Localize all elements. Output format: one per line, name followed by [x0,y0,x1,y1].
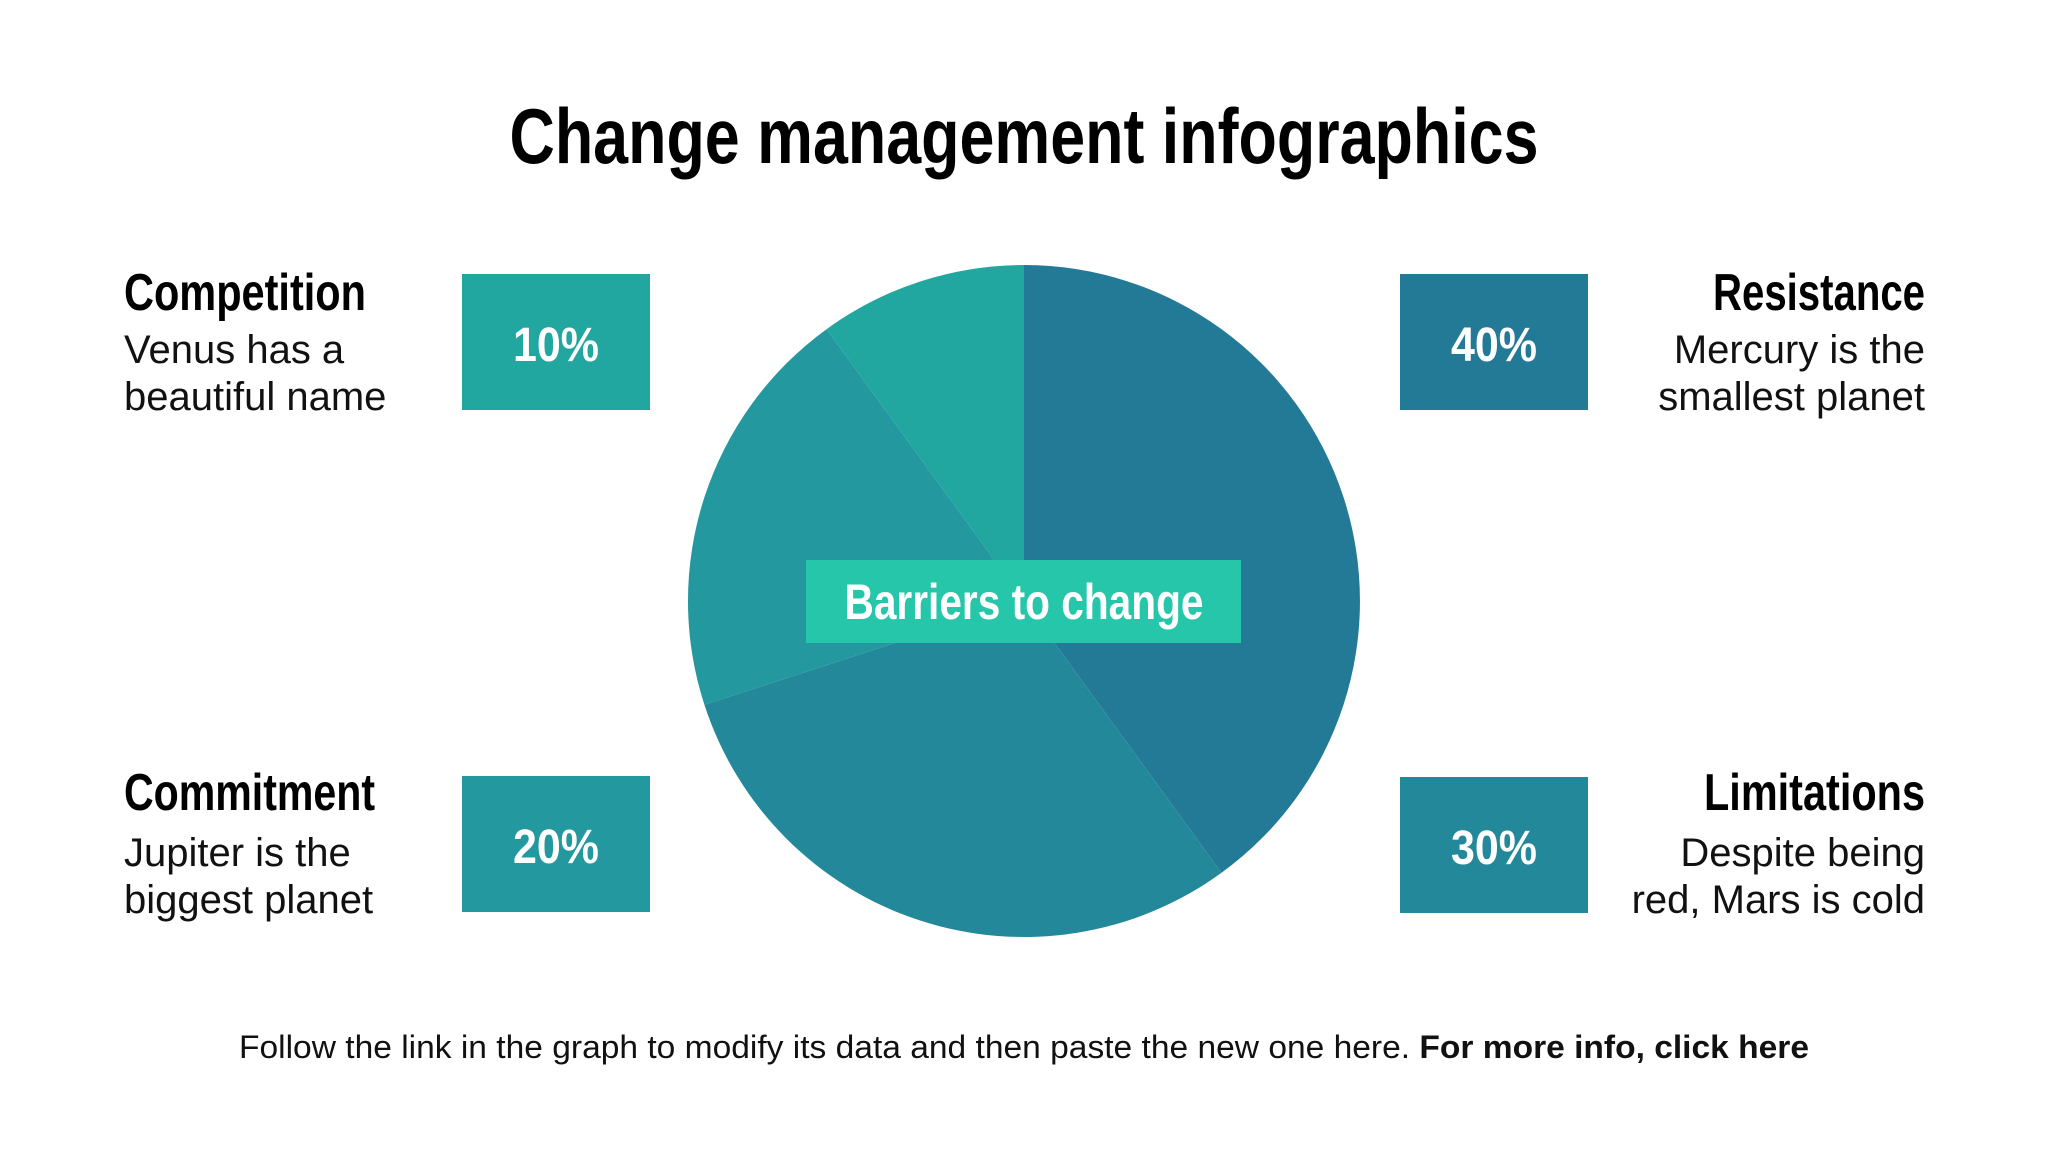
slice: commitment 20% [688,329,1024,705]
text block: resistance: smallest planet [1658,375,1925,419]
text block: limitations: red, Mars is cold [1632,878,1925,922]
slice: competition 10% [826,265,1024,601]
box: 10%: 10% [513,319,599,372]
slice: limitations 30% [704,601,1222,937]
box: 20% [462,776,650,912]
box: 40%: 40% [1451,319,1537,372]
pie chart [688,265,1360,937]
box: 30%: 30% [1451,822,1537,875]
box: 30% [1400,777,1588,913]
text block: limitations [1632,764,1925,922]
footer: Follow the link in the graph to modify its data and then paste the new one here. For more info, click here [239,1029,1809,1065]
text block: resistance: Mercury is the [1674,328,1925,372]
text block: commitment: Commitment [124,764,375,822]
text block: commitment: Jupiter is the [124,831,351,875]
text block: resistance [1658,264,1925,419]
center label [806,560,1241,643]
slice: resistance 40% [1024,265,1360,873]
text block: limitations: Limitations [1704,764,1925,822]
text block: limitations: Despite being [1680,831,1925,875]
center label: Barriers to change [844,574,1204,630]
text block: competition: Competition [124,264,366,322]
box: 20%: 20% [513,821,599,874]
title: Change management infographics [510,92,1538,180]
text block: competition: beautiful name [124,375,386,419]
text block: competition: Venus has a [124,328,345,372]
text block: commitment [124,764,375,922]
text block: competition [124,264,386,419]
text block: commitment: biggest planet [124,878,373,922]
text block: resistance: Resistance [1713,264,1925,322]
box: 40% [1400,274,1588,410]
box: 10% [462,274,650,410]
